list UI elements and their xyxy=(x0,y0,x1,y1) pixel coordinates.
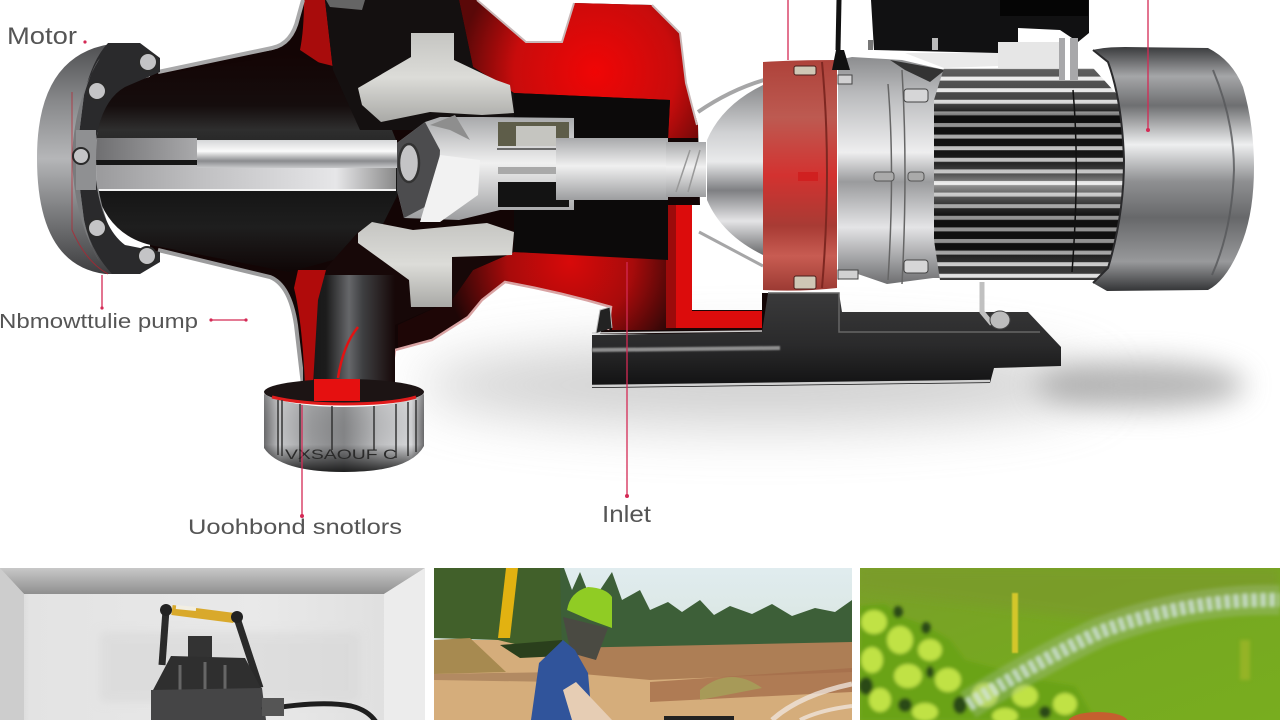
coupling shaft xyxy=(556,138,668,200)
motor end bell xyxy=(838,57,945,284)
housing silhouette xyxy=(150,0,768,385)
shrub xyxy=(859,604,1095,720)
label: motor: Motor xyxy=(7,23,77,50)
terracotta pot xyxy=(1068,712,1128,720)
floor shadow xyxy=(420,343,1245,427)
label: inlet: Inlet xyxy=(602,501,652,527)
casing silver edges xyxy=(158,0,303,72)
yellow pole xyxy=(498,568,518,638)
cavity lower xyxy=(514,198,668,260)
panel: garden sprinkler xyxy=(859,568,1280,720)
outlet collar xyxy=(264,379,424,472)
flange dark plate xyxy=(76,43,160,274)
flange face xyxy=(37,43,135,274)
end cap xyxy=(1093,47,1254,291)
upper black neck xyxy=(325,0,514,130)
red upper casting xyxy=(459,0,698,138)
flange bolts xyxy=(73,53,157,265)
shaft xyxy=(96,138,397,191)
red rib upper xyxy=(300,0,333,70)
cooling fins xyxy=(934,68,1124,280)
hose spray xyxy=(772,684,852,720)
base bolt xyxy=(982,282,992,324)
cable xyxy=(838,0,839,50)
red lower casting xyxy=(398,205,762,350)
panel: indoor pump xyxy=(0,568,425,720)
yellow flower stalk xyxy=(1012,593,1018,653)
impeller slots xyxy=(498,122,569,146)
impeller lower vane xyxy=(358,222,514,307)
conduit xyxy=(1059,38,1078,80)
cavity upper xyxy=(514,93,670,140)
impeller hub xyxy=(397,117,574,220)
impeller upper vane xyxy=(358,33,514,122)
portable pump xyxy=(151,604,376,720)
water spray xyxy=(968,600,1280,705)
red flange xyxy=(763,60,837,291)
label: pump: Nbmowttulie pump xyxy=(0,310,198,333)
interior chamber xyxy=(96,50,400,272)
control box xyxy=(871,0,1089,53)
outlet pipe xyxy=(303,275,395,385)
motor xyxy=(698,0,1254,291)
red rib lower xyxy=(294,270,326,385)
panel: field worker xyxy=(434,568,852,720)
flange xyxy=(37,43,160,274)
pump housing cutaway xyxy=(96,0,768,385)
base plate xyxy=(592,282,1061,388)
worker xyxy=(531,587,612,720)
leader lines xyxy=(83,0,1150,518)
label: outlet: Uoohbond snotlors xyxy=(188,516,402,539)
cone adapter xyxy=(707,85,763,255)
collar embossing: VXSAOUF C xyxy=(285,446,397,462)
